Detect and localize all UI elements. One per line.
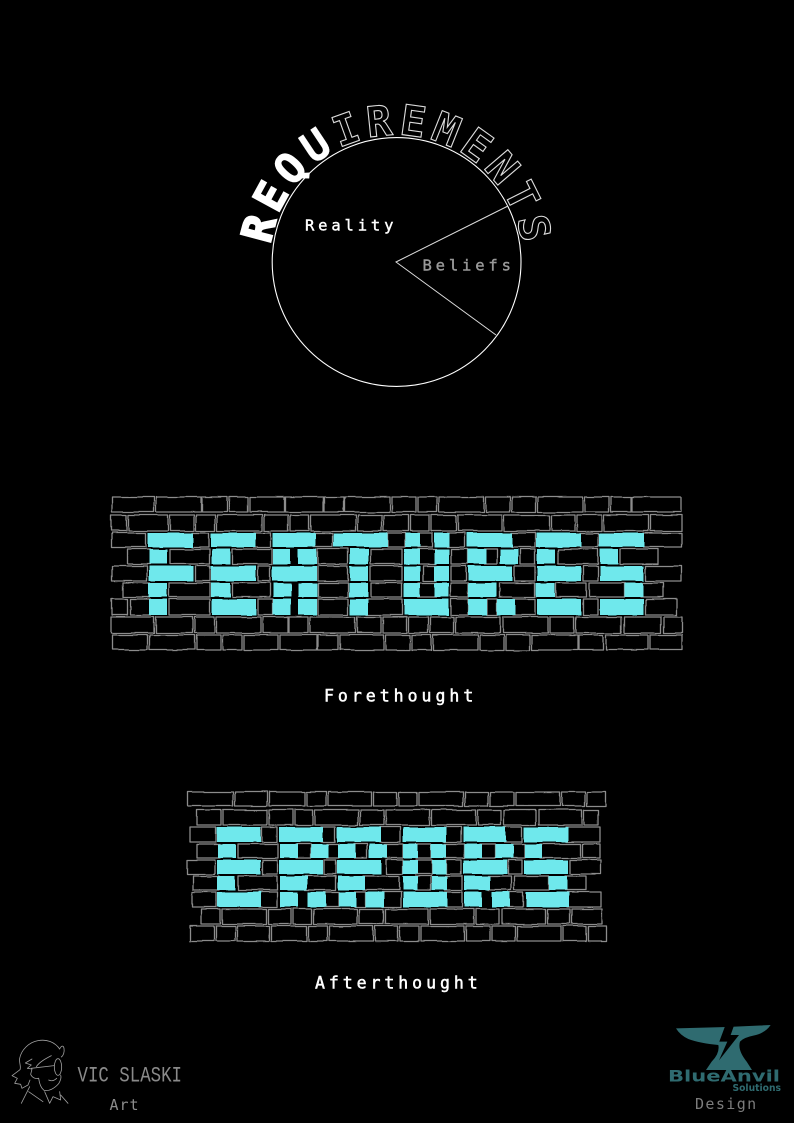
label: Reality: Reality <box>305 217 397 235</box>
icon: anvil logo with lightning bolt <box>676 1024 771 1070</box>
credit: artist <box>12 1040 182 1114</box>
caption: Forethought: Forethought <box>324 686 477 706</box>
brick wall: ERRORS <box>187 792 607 941</box>
caption: Afterthought: Afterthought <box>315 974 482 993</box>
plain bricks <box>111 497 682 650</box>
artist name: VIC SLASKI <box>78 1064 182 1088</box>
cyan letter bricks <box>148 533 644 615</box>
cyan letter bricks <box>217 827 569 907</box>
Solutions wordmark: Solutions <box>732 1083 781 1094</box>
credit: design <box>668 1024 781 1113</box>
plain bricks <box>187 792 607 941</box>
label: Art: Art <box>110 1096 140 1114</box>
label: Design: Design <box>695 1095 758 1113</box>
BlueAnvil wordmark: BlueAnvil <box>668 1067 780 1086</box>
pie chart: requirements <box>272 138 521 386</box>
pie circle <box>272 138 521 386</box>
icon: portrait line drawing <box>12 1040 68 1103</box>
label: Beliefs: Beliefs <box>422 257 515 275</box>
title: REQUIREMENTS on arc: REQUIREMENTS <box>240 104 552 243</box>
beliefs wedge lines <box>396 206 508 335</box>
brick wall: FEATURES <box>111 497 682 650</box>
